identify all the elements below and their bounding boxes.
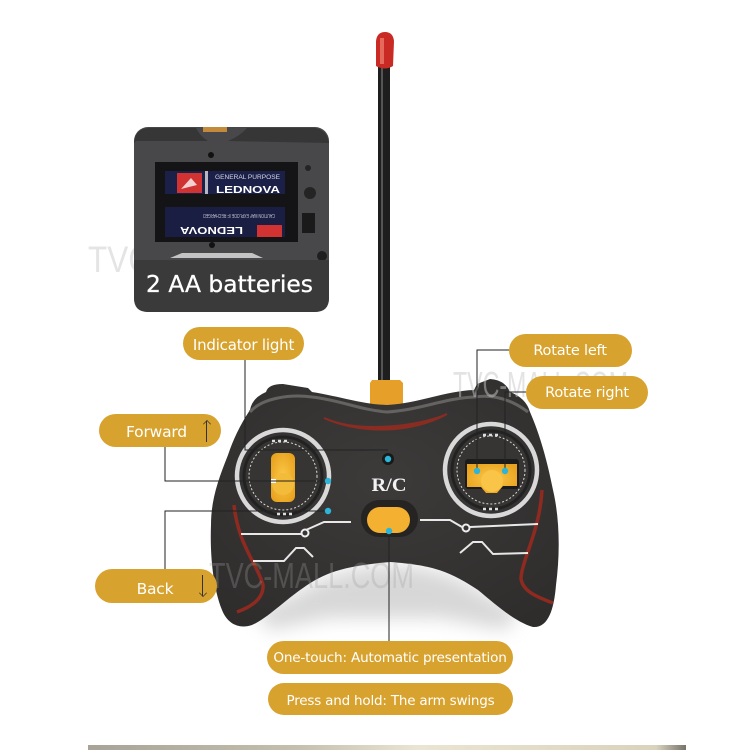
battery top: GENERAL PURPOSE bbox=[215, 174, 281, 181]
label: one-touch: One-touch: Automatic presentation bbox=[273, 650, 507, 666]
red accents bbox=[324, 414, 447, 430]
watermark: over controller: TVC-MALL.COM bbox=[209, 555, 414, 596]
battery top: LEDNOVA bbox=[216, 184, 281, 196]
label: indicator light bbox=[183, 327, 304, 360]
battery bottom: LEDNOVA bbox=[179, 224, 243, 236]
label: forward: Forward bbox=[126, 423, 187, 441]
label: rotate right: Rotate right bbox=[545, 385, 629, 401]
battery compartment panel bbox=[134, 127, 329, 312]
orange button bbox=[361, 500, 418, 537]
blue marker dots bbox=[325, 456, 508, 534]
white circuit lines bbox=[241, 522, 351, 561]
battery bottom: CAUTION MAY EXPLODE IF RECHARGED bbox=[203, 212, 275, 218]
label: rotate left bbox=[509, 334, 632, 367]
battery bottom bbox=[165, 207, 285, 237]
label: forward bbox=[99, 414, 221, 447]
label: press and hold: Press and hold: The arm swings bbox=[287, 693, 494, 709]
bottom image strip bbox=[88, 745, 686, 750]
label: press and hold bbox=[268, 683, 513, 715]
battery top bbox=[165, 171, 285, 196]
controller shadow bbox=[255, 565, 520, 630]
leader lines bbox=[165, 350, 526, 641]
indicator light bbox=[382, 453, 394, 465]
label: indicator light: Indicator light bbox=[193, 336, 294, 354]
battery label band bbox=[134, 260, 329, 312]
label: rotate right bbox=[526, 376, 648, 409]
watermark: upper right: TVC-MALL.COM bbox=[453, 364, 628, 405]
battery label text: 2 AA batteries bbox=[146, 272, 313, 298]
label: one-touch bbox=[267, 641, 513, 674]
label: back: Back bbox=[137, 580, 173, 598]
antenna bbox=[370, 32, 403, 408]
label: rotate left: Rotate left bbox=[533, 343, 607, 359]
controller body bbox=[211, 379, 559, 627]
left stick ring bbox=[237, 430, 329, 522]
label: back bbox=[95, 569, 217, 603]
watermark: upper left: TVC-MALL.COM bbox=[88, 239, 326, 280]
battery bay bbox=[155, 162, 298, 242]
right stick ring bbox=[445, 424, 537, 516]
R/C logo: R/C bbox=[372, 475, 406, 496]
